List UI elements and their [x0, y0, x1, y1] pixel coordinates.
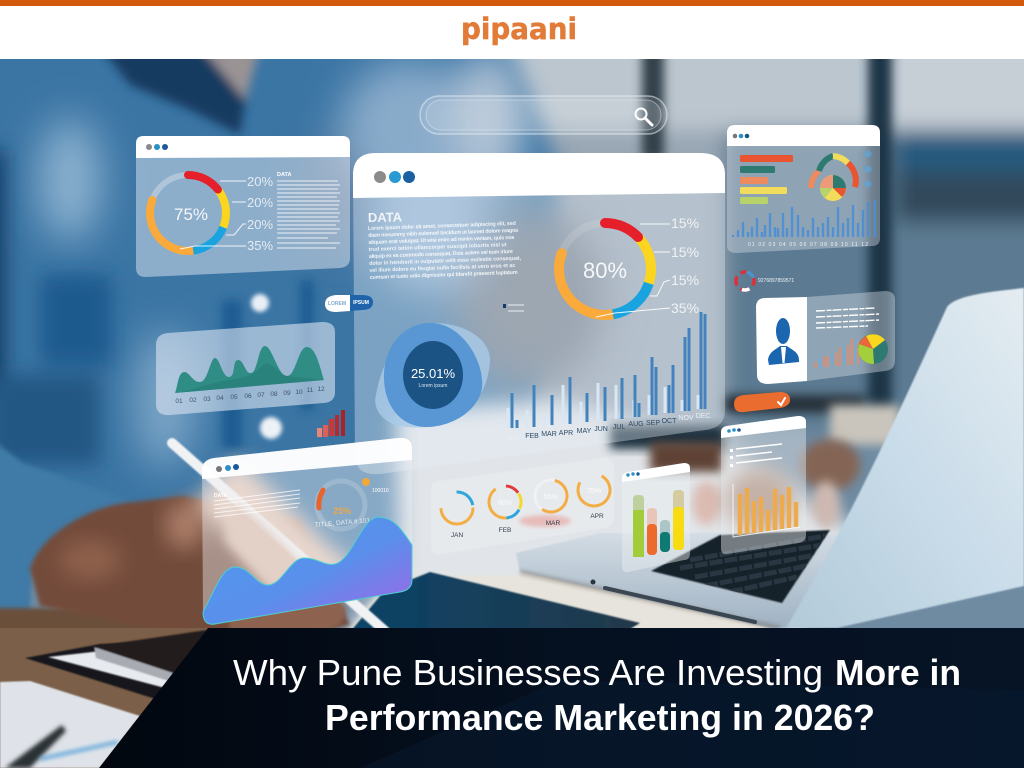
blue bar chart: [733, 200, 875, 237]
percent labels: 20%: [247, 217, 273, 232]
lorem ipsum body text: aliquam erat volutpat. Ut wisi enim ad minim veniam, quis nos: [368, 235, 514, 246]
axis labels: 07: [257, 392, 265, 399]
axis labels: [175, 386, 325, 405]
gauge 25%: [315, 481, 371, 529]
search bar: [420, 96, 667, 134]
percent labels: 35%: [671, 300, 699, 316]
axis labels: 06: [244, 393, 252, 400]
toggle pill LOREM IPSUM: [325, 295, 373, 312]
month labels: JAN: [451, 532, 463, 539]
donut chart 75%: [135, 160, 241, 266]
lorem ipsum body text: vel illum dolore eu feugiat nulla facilisis at vero eros et ac: [369, 263, 515, 274]
panel: 75% donut: 75%: [174, 205, 208, 224]
percent labels: 15%: [671, 244, 699, 260]
bars: [633, 490, 684, 557]
ring APR: 75%: [587, 488, 601, 495]
title lines: Performance Marketing in 2026?: [325, 697, 875, 738]
axis labels: 09: [283, 390, 291, 397]
bar chart JAN-DEC: DEC: [696, 413, 710, 420]
axis labels: 01: [175, 398, 183, 405]
panel: top right charts: [727, 125, 880, 253]
mini text block: [214, 490, 300, 517]
bar chart JAN-DEC: SEP: [646, 420, 660, 427]
month labels: MAR: [546, 520, 561, 527]
info marker: 100010: [372, 488, 389, 494]
desk bottom-left: [0, 628, 260, 768]
percent labels: 15%: [671, 272, 699, 288]
lorem ipsum body text: [368, 221, 522, 281]
phone device: [94, 630, 207, 682]
pen on paper: [5, 725, 66, 768]
bokeh lights: [251, 294, 282, 439]
area chart gradient: [203, 517, 412, 624]
axis labels: 01 02 03 04 05 06 07 08 09 10 11 12: [748, 242, 868, 248]
gauge 25%: TITLE, DATA # 101: [315, 517, 371, 529]
toggle pill LOREM IPSUM: IPSUM: [353, 300, 369, 306]
shirt: [0, 0, 605, 560]
mini text block: DATA: [214, 493, 228, 499]
month labels: APR: [590, 513, 604, 520]
orange button with check: [734, 392, 790, 412]
bar chart JAN-DEC: MAR: [541, 431, 557, 438]
percent labels: [671, 215, 699, 316]
lorem ipsum body text: dolor in hendrerit in vulputate velit esse molestie consequat,: [369, 256, 522, 267]
axis labels: 11: [307, 387, 314, 394]
leader lines: [596, 224, 670, 317]
text lines: [816, 308, 879, 328]
small data text: [277, 172, 340, 248]
bar chart JAN-DEC: AUG: [628, 421, 644, 428]
mini bar chart: [816, 339, 858, 368]
ring JAN: [441, 492, 473, 524]
bars: [740, 487, 796, 535]
tablet: [350, 572, 640, 632]
donut chart 80%: [540, 204, 670, 334]
smudge under MAR: [519, 515, 571, 527]
ring FEB: 80%: [498, 500, 512, 507]
header bar with logo: [0, 0, 1024, 59]
bar chart JAN-DEC: APR: [559, 430, 573, 437]
laptop base and keyboard: [516, 530, 840, 628]
gauge 25%: 25%: [333, 506, 351, 516]
month labels: [451, 513, 604, 539]
blob stat 25.01%: Lorem ipsum: [419, 383, 447, 389]
bar chart JAN-DEC: [507, 312, 710, 442]
legend markers: [864, 150, 872, 188]
percent labels: 35%: [247, 238, 273, 253]
panel: pen dashboard: [202, 438, 412, 624]
small data text: DATA: [277, 172, 291, 178]
toggle pill LOREM IPSUM: LOREM: [328, 301, 346, 307]
ring APR: [572, 468, 616, 512]
blob stat 25.01%: [375, 323, 490, 428]
lorem ipsum body text: Lorem ipsum dolor sit amet, consectetuer adipiscing elit, sed: [368, 221, 516, 232]
axis labels: 04: [216, 395, 224, 402]
list lines: [736, 444, 782, 463]
title banner: [99, 628, 1024, 768]
axis labels: 10: [295, 389, 303, 396]
notebook: [25, 640, 200, 702]
dark area below main panel: [610, 425, 725, 449]
table surface and bright area: [0, 400, 860, 648]
panel: bar tiles: [622, 463, 690, 572]
panel: monthly rings: [431, 458, 616, 554]
left sleeve: [0, 444, 64, 610]
panel: profile card: [756, 291, 895, 384]
paper: [0, 681, 140, 768]
bar chart JAN-DEC: JUL: [613, 424, 625, 431]
small ring with number: [733, 269, 794, 293]
horizontal bars: [740, 155, 793, 204]
pie chart: [858, 334, 888, 364]
heading: DATA: DATA: [368, 209, 403, 225]
gauge and pie: [811, 156, 856, 201]
fingers over pen: [228, 602, 348, 628]
axis labels: 02: [189, 397, 197, 404]
percent labels: [247, 174, 273, 253]
panel: area chart 01-12: [156, 322, 335, 415]
leader lines: [180, 181, 246, 249]
bar chart JAN-DEC: MAY: [577, 428, 592, 435]
ring MAR: 55%: [544, 494, 558, 501]
laptop lid: [786, 288, 1024, 628]
background photo: person at a laptop: [0, 59, 1024, 628]
title lines: [233, 652, 961, 738]
bar chart JAN-DEC: FEB: [525, 433, 539, 440]
axis labels: 08: [270, 391, 278, 398]
axis labels: 12: [317, 386, 325, 393]
legend marker: [503, 304, 524, 311]
office background right: [504, 59, 1024, 432]
teal area chart: [175, 346, 324, 393]
blob stat 25.01%: 25.01%: [411, 366, 455, 381]
stylus pen: [172, 443, 385, 631]
icon: magnifier: [636, 108, 652, 125]
title lines: Why Pune Businesses Are Investing: [233, 652, 823, 693]
ring MAR: [529, 474, 573, 518]
panel: main dashboard: 80%: [583, 258, 627, 283]
lorem ipsum body text: cumsan et iusto odio dignissim qui blandit praesent luptatum: [370, 270, 518, 281]
right hand: [650, 405, 900, 532]
icon: red growth bars: [317, 410, 345, 437]
bar chart JAN-DEC: OCT: [662, 418, 677, 425]
panel: orange bar chart: [721, 416, 806, 554]
icon: businessman: [768, 318, 799, 365]
ring FEB: [483, 480, 527, 524]
decorative reflection: [360, 680, 1024, 768]
bar chart JAN-DEC: JUN: [594, 426, 608, 433]
logo: pipaani: pipaani: [461, 12, 577, 46]
lorem ipsum body text: diam nonummy nibh euismod tincidunt ut laoreet dolore magna: [368, 228, 519, 239]
bar chart JAN-DEC: NOV: [678, 415, 694, 422]
bar chart JAN-DEC: JAN: [507, 435, 521, 442]
axis labels: 03: [203, 396, 211, 403]
info marker: [362, 478, 389, 494]
percent labels: 20%: [247, 195, 273, 210]
writing hand: [30, 480, 350, 636]
axis labels: 05: [230, 394, 238, 401]
lorem ipsum body text: aliquip ex ea commodo consequat. Duis autem vel eum iriure: [369, 249, 513, 260]
percent labels: 20%: [247, 174, 273, 189]
lorem ipsum body text: trud exerci tation ullamcorper suscipit lobortis nisl ut: [369, 242, 507, 253]
panel: main dashboard: [353, 153, 725, 474]
month labels: FEB: [499, 527, 511, 534]
panel: 75% donut: [135, 136, 350, 277]
small ring with number: 9276897859571: [758, 278, 794, 284]
percent labels: 15%: [671, 215, 699, 231]
title lines: More in: [835, 652, 961, 693]
